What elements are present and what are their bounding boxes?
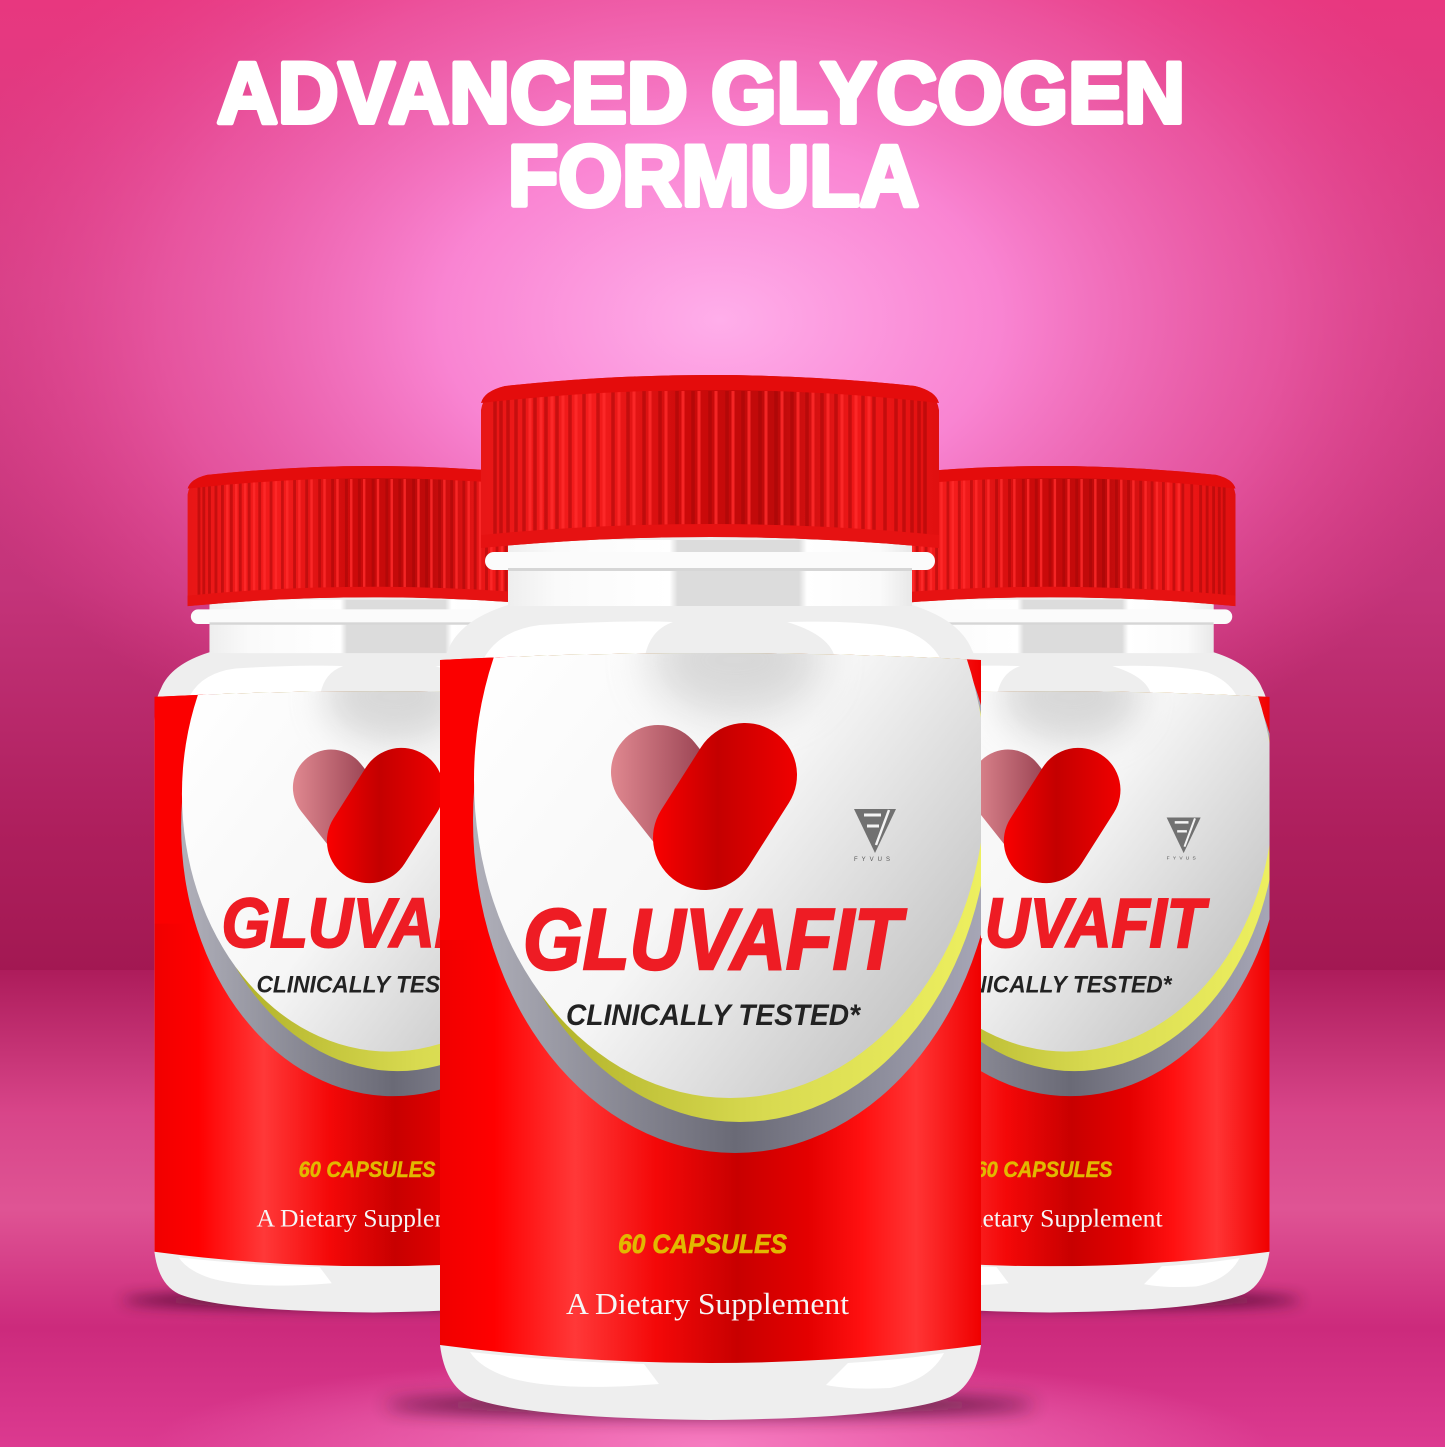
center heart logo: [658, 772, 745, 838]
bottle: right: [799, 466, 1301, 1312]
left bottle label: [154, 536, 606, 1284]
center brand name: GLUVAFIT: [523, 892, 907, 988]
background floor: [0, 970, 1445, 1447]
right dietary text: A Dietary Supplement: [933, 1206, 1163, 1233]
right fyvus logo: [1167, 818, 1201, 853]
center bottle body: [440, 535, 981, 1420]
center dietary text: A Dietary Supplement: [566, 1286, 849, 1321]
left bottle shadow: [122, 1292, 624, 1308]
left fyvus logo: [490, 818, 524, 853]
background wall: [0, 0, 1445, 975]
left bottle cap: [188, 466, 559, 606]
right bottle shadow: [799, 1292, 1301, 1308]
right fyvus wordmark: FYVUS: [1167, 856, 1199, 862]
center fyvus wordmark: FYVUS: [854, 857, 894, 863]
right capsule count: 60 CAPSULES: [975, 1157, 1113, 1182]
right bottle body: [831, 596, 1270, 1312]
right brand name: GLUVAFIT: [899, 884, 1210, 962]
title: [217, 46, 1185, 224]
left capsule count: 60 CAPSULES: [299, 1157, 436, 1182]
left brand name: GLUVAFIT: [222, 884, 533, 962]
center fyvus logo: [854, 809, 896, 853]
right heart logo: [1008, 788, 1078, 841]
right bottle cap: [865, 466, 1235, 606]
center bottle label: [440, 462, 997, 1385]
right bottle label: [831, 536, 1282, 1284]
left tagline: CLINICALLY TESTED*: [256, 971, 496, 998]
center bottle shadow: [385, 1395, 1035, 1415]
left fyvus wordmark: FYVUS: [490, 856, 522, 862]
title: ADVANCED GLYCOGEN: [217, 46, 1185, 142]
right tagline: CLINICALLY TESTED*: [933, 971, 1173, 998]
left heart logo: [331, 788, 401, 841]
left dietary text: A Dietary Supplement: [256, 1206, 486, 1233]
title: FORMULA: [508, 128, 919, 224]
center bottle cap: [481, 375, 939, 548]
left bottle body: [154, 596, 593, 1312]
bottle: center: [385, 375, 1035, 1420]
center capsule count: 60 CAPSULES: [618, 1229, 787, 1259]
center tagline: CLINICALLY TESTED*: [566, 999, 861, 1032]
bottle: left: [122, 466, 624, 1312]
